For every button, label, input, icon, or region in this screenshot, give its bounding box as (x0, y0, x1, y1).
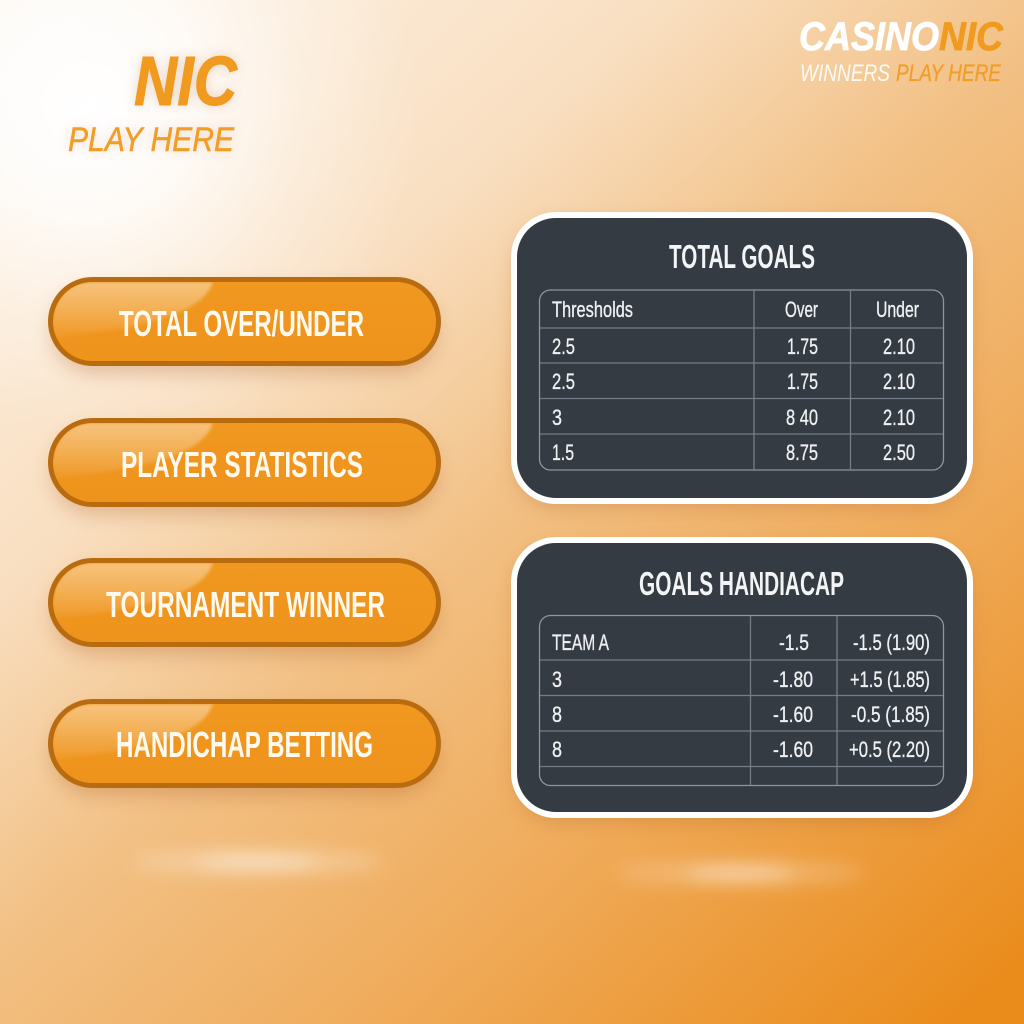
table: total goals: 2.50 (883, 440, 915, 465)
heading: goals handiacap: GOALS HANDIACAP (639, 565, 844, 602)
table: goals handicap: -1.80 (773, 667, 813, 692)
table: goals handicap: 8 (552, 737, 562, 762)
table: total goals: Over (785, 297, 818, 322)
table: goals handicap: -0.5 (1.85) (851, 702, 930, 727)
table: total goals: 2.10 (883, 369, 915, 394)
glow: lower left (133, 852, 383, 872)
logo fragment: top left: NIC (134, 42, 238, 120)
logo fragment: top left: PLAY HERE (68, 121, 234, 159)
table: total goals: 1.5 (552, 440, 574, 465)
button: tournament winner (50, 560, 438, 654)
heading: total goals: TOTAL GOALS (669, 238, 815, 275)
button: total over/under (50, 280, 438, 373)
table: total goals: 2.5 (552, 369, 575, 394)
button: player statistics: PLAYER STATISTICS (121, 444, 363, 485)
table: goals handicap: -1.60 (773, 702, 813, 727)
button: total over/under: TOTAL OVER/UNDER (119, 303, 364, 344)
table: total goals (540, 290, 944, 470)
table: goals handicap: 3 (552, 667, 562, 692)
panel: total goals (514, 215, 970, 508)
table: total goals: 1.75 (787, 334, 818, 359)
table: goals handicap: +0.5 (2.20) (849, 737, 930, 762)
table: total goals: 2.5 (552, 334, 575, 359)
panel: goals handicap (514, 540, 970, 822)
table: goals handicap: 8 (552, 702, 562, 727)
logo: Casinonic top right: CASINO (799, 15, 939, 59)
table: goals handicap: TEAM A (552, 630, 609, 655)
glow: lower right (615, 863, 865, 883)
button: handichap betting: HANDICHAP BETTING (116, 724, 373, 765)
logo fragment: top left (68, 42, 238, 159)
button: tournament winner: TOURNAMENT WINNER (106, 584, 385, 625)
logo fragment: top left: PLAY HERE (68, 121, 234, 159)
table: total goals: 8.75 (786, 440, 818, 465)
table: total goals: 2.10 (883, 334, 915, 359)
table: total goals: 3 (552, 405, 562, 430)
table: goals handicap (540, 616, 944, 786)
table: total goals: Thresholds (552, 297, 633, 322)
table: total goals: 8 40 (786, 405, 818, 430)
button: player statistics (50, 420, 438, 514)
table: total goals: 2.10 (883, 405, 915, 430)
table: goals handicap: -1.60 (773, 737, 813, 762)
table: total goals: Under (876, 297, 919, 322)
button: handichap betting (50, 702, 438, 795)
table: goals handicap: -1.5 (779, 630, 809, 655)
logo fragment: top left: NIC (134, 42, 238, 120)
table: goals handicap: +1.5 (1.85) (850, 667, 930, 692)
table: goals handicap: -1.5 (1.90) (853, 630, 930, 655)
logo: Casinonic top right (799, 15, 1004, 87)
logo: Casinonic top right: WINNERS (800, 60, 890, 87)
table: total goals: 1.75 (787, 369, 818, 394)
logo: Casinonic top right: NIC (939, 15, 1004, 59)
